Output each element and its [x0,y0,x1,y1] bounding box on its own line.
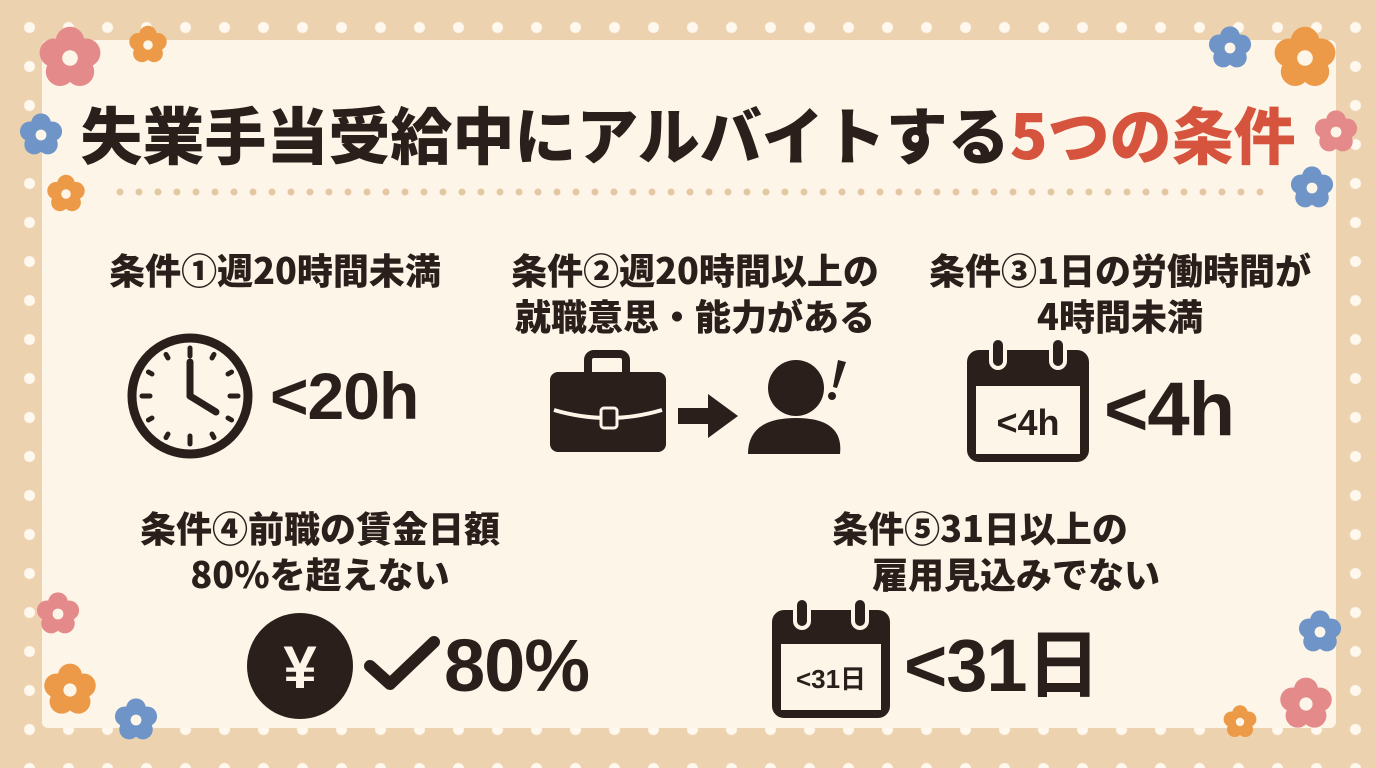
icon: yen coin: ¥ [283,634,317,701]
icon: briefcase to person [550,350,846,454]
heading: condition 5: 雇用見込みでない [872,547,1160,599]
heading: condition 3: 4時間未満 [1037,289,1203,341]
icon: calendar <4h [967,340,1089,462]
heading: condition 2: 条件②週20時間以上の [511,243,879,295]
value: <4h: <4h [1104,367,1234,452]
heading: condition 1: 条件①週20時間未満 [109,243,441,295]
icon: check [364,636,440,690]
heading: condition 5 [832,501,1160,599]
heading: condition 2 [511,243,879,341]
icon: clock [128,334,252,458]
value: 80%: 80% [444,624,589,707]
heading: condition 4: 条件④前職の賃金日額 [140,501,500,553]
heading: condition 2: 就職意思・能力がある [515,289,875,341]
icon: calendar <31日 [772,600,890,718]
title: 失業手当受給中にアルバイトする5つの条件 [80,87,1296,177]
value: <20h: <20h [270,359,418,433]
value: <31日: <31日 [904,624,1100,707]
icon: calendar <31日: <31日 [796,664,866,694]
heading: condition 3 [929,243,1311,341]
heading: condition 4 [140,501,500,599]
heading: condition 5: 条件⑤31日以上の [832,501,1128,553]
icon: calendar <4h: <4h [996,402,1060,443]
icon: yen coin [247,613,353,719]
heading: condition 3: 条件③1日の労働時間が [929,243,1311,295]
heading: condition 4: 80%を超えない [190,547,450,599]
